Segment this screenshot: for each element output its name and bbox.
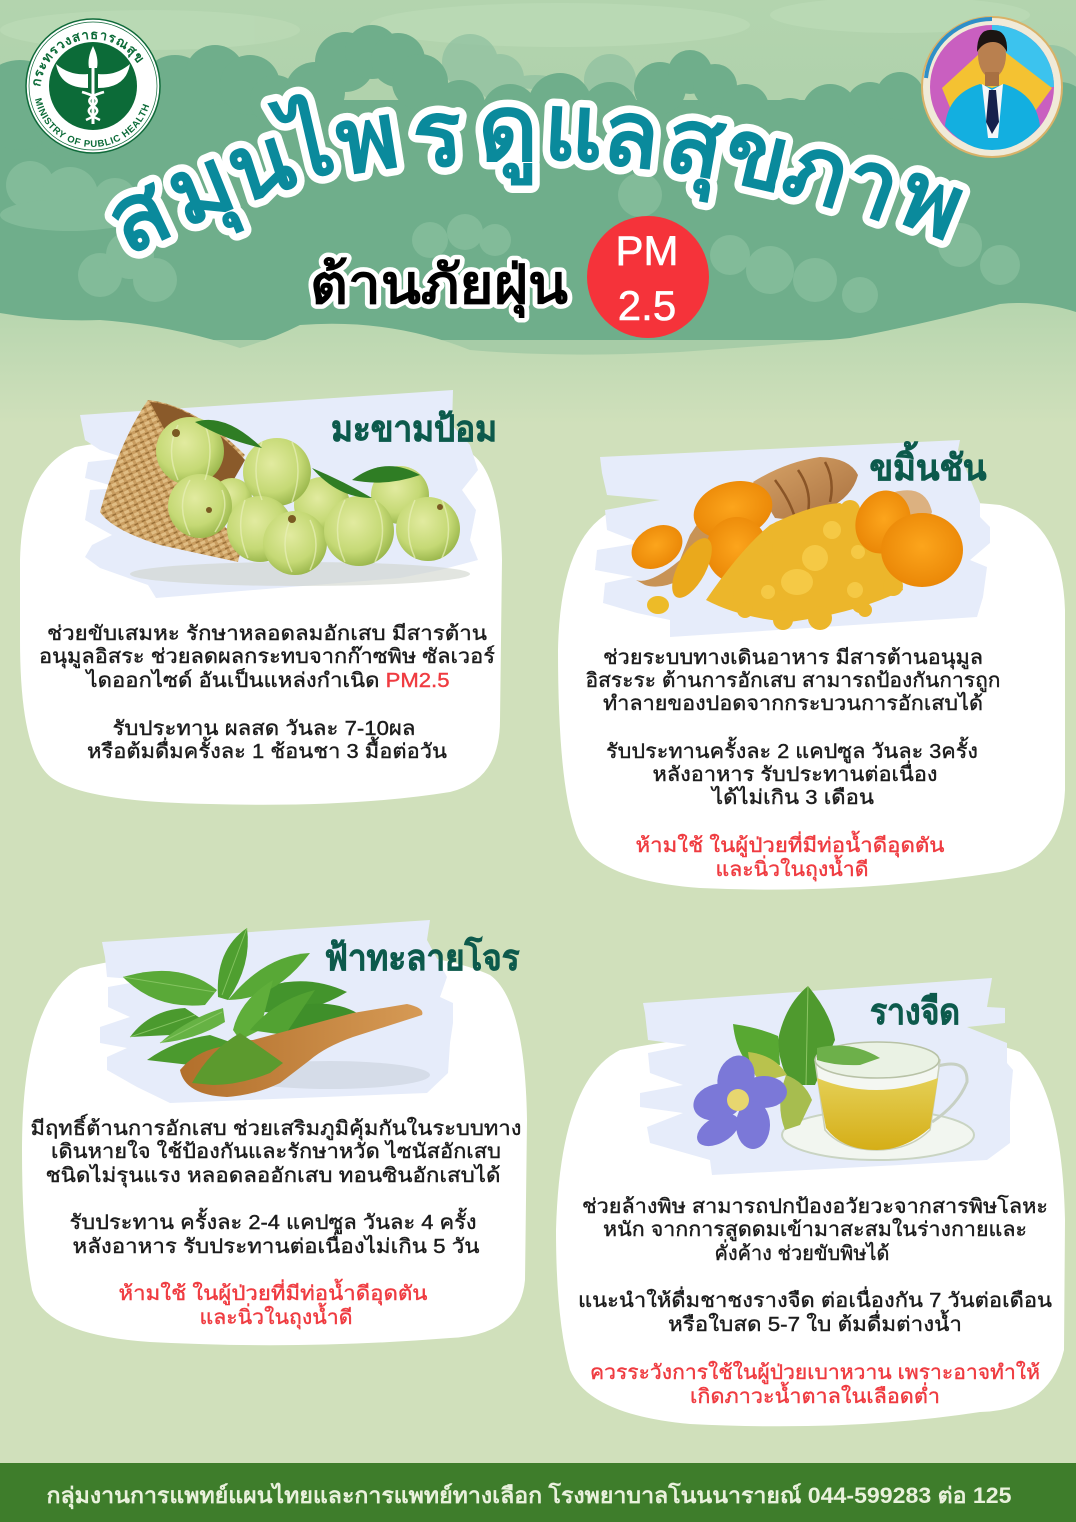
title: สมุนไพรดูแลสุขภาพ: น: [215, 106, 306, 223]
title: สมุนไพรดูแลสุขภาพ: แ: [541, 77, 606, 182]
brush stroke: [640, 978, 1013, 1175]
body text: [39, 623, 495, 763]
person in blue suit: [945, 30, 1040, 150]
brush stroke: [100, 920, 453, 1103]
header background: sky and clouds: [0, 0, 1076, 425]
title: สมุนไพรดูแลสุขภาพ: า: [831, 128, 914, 242]
body text: แนะนำให้ดื่มชาชงรางจืด ต่อเนื่องกัน 7 วันต่อเดือน: [578, 1286, 1052, 1312]
illustration: basket of amla fruit: [100, 400, 470, 586]
body text: และนิ่วในถุงน้ำดี: [716, 855, 868, 882]
heading: รางจืด: [870, 991, 960, 1032]
foreground hills: [0, 303, 1076, 425]
body text: อนุมูลอิสระ ช่วยลดผลกระทบจากก๊าซพิษ ซัลเวอร์: [39, 645, 495, 669]
body text: หนัก จากการสูดดมเข้ามาสะสมในร่างกายและ: [603, 1218, 1027, 1242]
emblem: caduceus: [56, 46, 130, 124]
body text: ห้ามใช้ ในผู้ป่วยที่มีท่อน้ำดีอุดตัน: [636, 831, 945, 858]
heading: ขมิ้นชัน: [870, 441, 987, 488]
brush stroke: [595, 440, 990, 637]
body text: ชนิดไม่รุนแรง หลอดลออักเสบ ทอนซินอักเสบได้: [46, 1164, 500, 1188]
panel: ขมิ้นชัน: [558, 440, 1065, 890]
illustration: turmeric and powder: [624, 457, 963, 630]
body text: [578, 1195, 1052, 1408]
brush stroke: [80, 390, 478, 598]
wooden spoon: [180, 1004, 422, 1097]
title: สมุนไพรดูแลสุขภาพ: พ: [884, 143, 979, 260]
body text: คั่งค้าง ช่วยขับพิษได้: [714, 1239, 890, 1265]
illustration: tea cup and flower: [689, 986, 974, 1160]
body text: ได้ไม่เกิน 3 เดือน: [710, 786, 874, 809]
body text: หลังอาหาร รับประทานต่อเนื่องไม่เกิน 5 วัน: [72, 1232, 480, 1258]
body text: ควรระวังการใช้ในผู้ป่วยเบาหวาน เพราะอาจทำให้: [590, 1361, 1040, 1385]
flower: [689, 1050, 787, 1153]
subtitle: ต้านภัยฝุ่น: [310, 255, 568, 319]
footer bar: [0, 1463, 1076, 1522]
body text: รับประทาน ผลสด วันละ 7-10ผล: [112, 718, 416, 740]
panel: ฟ้าทะลายโจร: [22, 920, 527, 1345]
body text: รับประทาน ครั้งละ 2-4 แคปซูล วันละ 4 ครั้ง: [70, 1208, 476, 1235]
panel: รางจืด: [556, 978, 1065, 1426]
heading: มะขามป้อม: [331, 408, 497, 449]
PM 2.5 badge: PM: [616, 227, 678, 274]
title: สมุนไพรดูแลสุขภาพ: พ: [329, 84, 405, 194]
logo: Ministry of Public Health: [25, 18, 161, 154]
turmeric powder pile: [706, 500, 903, 630]
body text: ทำลายของปอดจากกระบวนการอักเสบได้: [603, 692, 983, 715]
green powder: [192, 1033, 283, 1085]
title: สมุนไพรดูแลสุขภาพ: ร: [408, 82, 466, 188]
footer bar: กลุ่มงานการแพทย์แผนไทยและการแพทย์ทางเลือก โรงพยาบาลโนนนารายณ์ 044-599283 ต่อ 125: [46, 1482, 1012, 1510]
title: สมุนไพรดูแลสุขภาพ: ไ: [266, 89, 343, 203]
title: สมุนไพรดูแลสุขภาพ: ดู: [478, 78, 538, 186]
PM 2.5 badge: 2.5: [618, 282, 676, 329]
title: สมุนไพรดูแลสุขภาพ: สุ: [658, 88, 733, 205]
title: สมุนไพรดูแลสุขภาพ: มุ: [153, 129, 250, 251]
body text: ช่วยล้างพิษ สามารถปกป้องอวัยวะจากสารพิษโลหะ: [582, 1195, 1048, 1218]
logo: Ministry of Public Health: MINISTRY OF PUBLIC HEALTH: [35, 98, 150, 147]
heading: ฟ้าทะลายโจร: [324, 936, 520, 978]
body text: รับประทานครั้งละ 2 แคปซูล วันละ 3ครั้ง: [606, 737, 978, 764]
title: สมุนไพรดูแลสุขภาพ: [92, 77, 979, 274]
title: สมุนไพรดูแลสุขภาพ: ข: [715, 99, 799, 213]
body text: มีฤทธิ์ต้านการอักเสบ ช่วยเสริมภูมิคุ้มกันในระบบทาง: [30, 1113, 522, 1141]
body text: หรือใบสด 5-7 ใบ ต้มดื่มต่างน้ำ: [668, 1310, 962, 1336]
illustration: leaves and spoon: [123, 928, 430, 1097]
body text: เกิดภาวะน้ำตาลในเลือดต่ำ: [690, 1382, 940, 1408]
portrait badge: [922, 17, 1062, 157]
panel: มะขามป้อม: [20, 390, 502, 805]
body text: [30, 1113, 522, 1330]
body text: ช่วยระบบทางเดินอาหาร มีสารต้านอนุมูล: [603, 647, 983, 670]
title: สมุนไพรดูแลสุขภาพ: ส: [92, 157, 187, 274]
logo ring text: กระทรวงสาธารณสุข: [33, 32, 144, 86]
title: สมุนไพรดูแลสุขภาพ: ภ: [773, 113, 861, 228]
saucer: [782, 1110, 974, 1160]
body text: และนิ่วในถุงน้ำดี: [200, 1303, 352, 1330]
body text: ห้ามใช้ ในผู้ป่วยที่มีท่อน้ำดีอุดตัน: [118, 1279, 428, 1306]
PM 2.5 badge: [587, 216, 709, 338]
body text: อิสระระ ต้านการอักเสบ สามารถป้องกันการถูก: [586, 670, 1000, 693]
body text: เดินหายใจ ใช้ป้องกันและรักษาหวัด ไซนัสอักเสบ: [51, 1140, 501, 1163]
body text: ช่วยขับเสมหะ รักษาหลอดลมอักเสบ มีสารต้าน: [47, 623, 487, 645]
body text: ไดออกไซด์ อันเป็นแหล่งกำเนิด PM2.5: [84, 667, 450, 692]
body text: [586, 647, 1000, 882]
body text: หรือต้มดื่มครั้งละ 1 ช้อนชา 3 มื้อต่อวัน: [87, 737, 447, 763]
title: สมุนไพรดูแลสุขภาพ: ล: [598, 82, 665, 189]
body text: หลังอาหาร รับประทานต่อเนื่อง: [652, 760, 938, 786]
glass cup: [815, 1048, 940, 1150]
